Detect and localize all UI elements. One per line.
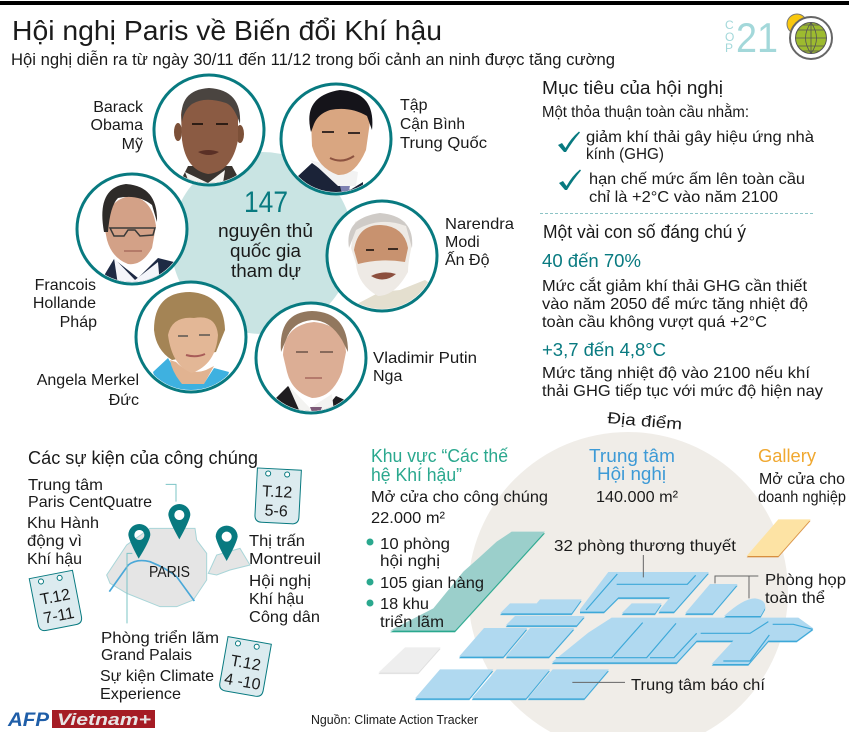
subtitle: Hội nghị diễn ra từ ngày 30/11 đến 11/12 trong bối cảnh an ninh được tăng cường — [11, 50, 615, 69]
label: plenary rooms — [765, 572, 846, 607]
label: climate action zone: Khí hậu — [27, 551, 82, 568]
label: Obama: Barack — [93, 99, 144, 116]
label: Montreuil: Công dân — [249, 609, 320, 626]
building: blank area — [378, 647, 441, 673]
central circle with count: 147 — [244, 186, 288, 219]
portrait: Obama — [154, 75, 264, 190]
column: conference centre — [589, 446, 679, 506]
icon: COP21 logo: 21 — [736, 14, 778, 61]
calendar: 7-11 — [29, 570, 83, 632]
label: Xi: Cận Bình — [400, 116, 465, 133]
calendar: 5-6: T.12 — [262, 483, 293, 502]
column: climate generations: Mở cửa cho công chúng — [371, 489, 548, 506]
label: Modi — [445, 216, 514, 269]
portrait: Merkel — [136, 282, 246, 395]
icon: COP21 logo: P — [725, 41, 733, 55]
central circle with count: tham dự — [231, 261, 301, 281]
label: Merkel: Angela Merkel — [37, 372, 139, 389]
source: Nguồn: Climate Action Tracker — [311, 712, 479, 727]
label: climate action zone — [27, 515, 99, 568]
calendar: 5-6: 5-6 — [264, 502, 288, 521]
label: Modi: Narendra — [445, 216, 514, 233]
label: Modi: Modi — [445, 234, 480, 251]
column: climate generations: 22.000 m² — [371, 510, 446, 527]
bullet list: 105 gian hàng — [380, 575, 484, 592]
label: Merkel — [37, 372, 139, 409]
panel: conference goals: hạn chế mức ấm lên toàn cầu — [589, 171, 805, 188]
column: conference centre: 140.000 m² — [596, 489, 679, 506]
building: gallery — [747, 519, 811, 556]
buildings: conference centre — [415, 572, 813, 698]
calendar: 5-6 — [255, 468, 301, 524]
title: Hội nghị Paris về Biến đổi Khí hậu — [12, 15, 442, 46]
label: Hollande: Pháp — [60, 314, 97, 331]
panel: key figures: vào năm 2050 để mức tăng nhiệt độ — [542, 295, 808, 313]
label: Obama — [91, 99, 144, 153]
icon: pin — [168, 504, 190, 539]
label: CentQuatre: Trung tâm — [28, 477, 103, 494]
icon: COP21 logo: C — [725, 18, 734, 32]
column: gallery: Gallery — [758, 446, 816, 466]
label: Obama: Obama — [91, 117, 143, 134]
venue background circle — [468, 432, 788, 732]
panel: conference goals: kính (GHG) — [586, 146, 664, 163]
label: Xi — [400, 97, 487, 152]
label: plenary rooms: Phòng họp — [765, 572, 846, 589]
central circle with count: quốc gia — [230, 241, 302, 261]
panel: key figures: 40 đến 70% — [542, 251, 641, 271]
panel: conference goals: Mục tiêu của hội nghị — [542, 78, 723, 98]
label: Montreuil: Khí hậu — [249, 591, 304, 608]
column: climate generations: Khu vực “Các thế — [371, 446, 508, 466]
label: Montreuil: Thị trấn — [249, 533, 305, 550]
column: gallery — [758, 446, 846, 506]
label: Grand Palais: Phòng triển lãm — [101, 629, 219, 647]
label: Modi: Ấn Độ — [445, 250, 490, 269]
panel: key figures: +3,7 đến 4,8°C — [542, 340, 666, 360]
portrait: Hollande — [77, 174, 187, 290]
panel: conference goals: Một thỏa thuận toàn cầu nhằm: — [542, 102, 749, 121]
panel: venue plan — [366, 409, 846, 732]
central circle with count — [171, 152, 353, 334]
label: Xi: Tập — [400, 97, 428, 114]
portrait: Putin — [256, 303, 366, 415]
label: Hollande — [33, 277, 97, 331]
icon: check mark — [559, 170, 581, 190]
panel: key figures: toàn cầu không vượt quá +2°C — [542, 314, 767, 331]
portrait: Xi — [281, 84, 391, 195]
label: CentQuatre — [28, 477, 152, 511]
icon: COP21 logo — [725, 14, 832, 61]
building: climate generations area — [390, 532, 545, 631]
label: Montreuil: Hội nghị — [249, 573, 311, 590]
calendar: 7-11: 7-11 — [42, 605, 76, 628]
column: climate generations: hệ Khí hậu” — [371, 465, 462, 485]
icon: COP21 logo: O — [725, 30, 734, 44]
calendar: 4-10: T.12 — [229, 653, 262, 675]
calendar: 7-11: T.12 — [39, 586, 72, 609]
panel: key figures: Mức tăng nhiệt độ vào 2100 nếu khí — [542, 365, 811, 382]
label: Hollande: Hollande — [33, 295, 96, 312]
panel: key figures: Mức cắt giảm khí thải GHG cần thiết — [542, 276, 808, 295]
central circle with count: nguyên thủ — [218, 221, 313, 241]
map label: Paris: PARIS — [149, 564, 190, 581]
panel: conference goals — [542, 78, 814, 206]
panel: conference goals: giảm khí thải gây hiệu ứng nhà — [586, 129, 814, 146]
column: conference centre: Trung tâm — [589, 446, 675, 466]
panel: public events map — [27, 448, 321, 703]
label: Xi: Trung Quốc — [400, 135, 487, 152]
label: plenary rooms: toàn thể — [765, 589, 825, 607]
label: Grand Palais: Experience — [100, 686, 181, 703]
logo: Vietnam+: Vietnam+ — [57, 710, 151, 729]
panel: key figures: Một vài con số đáng chú ý — [543, 222, 746, 242]
label: Obama: Mỹ — [122, 136, 143, 153]
floor plan — [378, 519, 813, 698]
bullet list: 10 phòng — [380, 536, 450, 553]
label: Grand Palais: Sự kiện Climate — [100, 668, 214, 685]
label: Putin — [373, 350, 477, 385]
label: Grand Palais: Grand Palais — [101, 647, 192, 664]
label: climate action zone: động vì — [27, 533, 82, 550]
label: Putin: Nga — [373, 368, 402, 385]
panel: key figures: thải GHG tiếp tục với mức độ hiện nay — [542, 383, 823, 400]
label: Putin: Vladimir Putin — [373, 350, 477, 367]
icon: pin — [216, 526, 238, 561]
panel: heads of state — [33, 75, 514, 415]
calendar: 4-10: 4 -10 — [223, 671, 262, 694]
label: press centre: Trung tâm báo chí — [631, 677, 766, 694]
label: Grand Palais — [100, 629, 219, 703]
column: climate generations — [366, 446, 548, 631]
label: lobby rooms: 32 phòng thương thuyết — [554, 538, 737, 555]
panel: key figures — [542, 222, 823, 400]
map of Paris — [107, 484, 250, 623]
top bar — [0, 1, 849, 5]
label: CentQuatre: Paris CentQuatre — [28, 494, 152, 511]
logo: AFP: AFP — [7, 710, 49, 731]
panel: public events map: Các sự kiện của công chúng — [28, 448, 258, 468]
label: Merkel: Đức — [109, 392, 139, 409]
icon: pin — [128, 524, 150, 559]
column: gallery: Mở cửa cho — [759, 471, 845, 488]
bullet list: 18 khu — [380, 596, 429, 613]
heading: location: Địa điểm — [607, 409, 683, 434]
bullet list: hội nghị — [380, 553, 440, 570]
portrait: Modi — [327, 201, 440, 315]
panel: conference goals: chỉ là +2°C vào năm 2100 — [589, 189, 778, 206]
column: conference centre: Hội nghị — [597, 464, 666, 484]
calendar: 4-10 — [219, 637, 271, 697]
icon: check mark — [558, 132, 580, 152]
label: climate action zone: Khu Hành — [27, 515, 99, 532]
label: Hollande: Francois — [35, 277, 96, 294]
bullet list — [366, 536, 484, 631]
label: Montreuil — [249, 533, 321, 626]
bullet list: triển lãm — [380, 613, 444, 631]
label: Montreuil: Montreuil — [249, 551, 321, 568]
